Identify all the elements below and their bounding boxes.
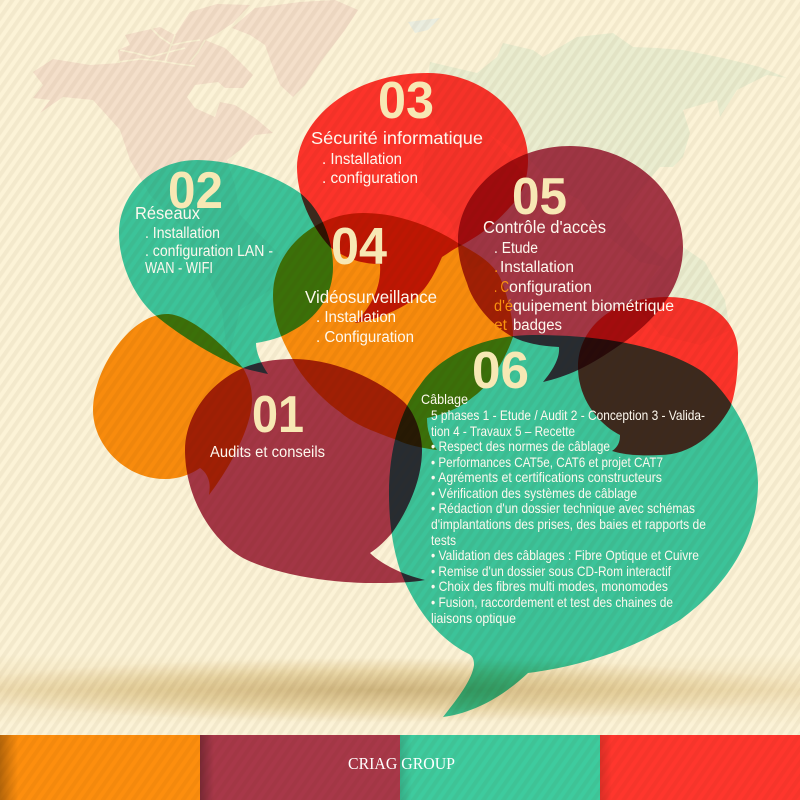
panel 04: Vidéosurveillance text: Vidéosurveillance bbox=[305, 287, 437, 307]
speech bubble 03: red bbox=[297, 73, 528, 323]
speech bubble 05: maroon bbox=[458, 146, 683, 382]
panel 02: Réseaux text bbox=[135, 162, 273, 277]
speech bubble 06: green bbox=[389, 335, 758, 717]
panel 05: Contrôle d'accès text: badges bbox=[513, 317, 562, 334]
panel 06: Câblage text: 5 phases 1 - Etude / Audit 2 - Conception 3 - Valida- bbox=[431, 408, 705, 423]
panel 03: Sécurité informatique text: . configuration bbox=[322, 170, 418, 187]
panel 05: Contrôle d'accès text: Installation bbox=[500, 259, 574, 276]
panel 05: Contrôle d'accès text: quipement biométrique bbox=[513, 298, 674, 315]
speech bubble 04: orange bbox=[273, 213, 513, 450]
ground shadow bbox=[0, 655, 800, 725]
panel 02: Réseaux text: WAN - WIFI bbox=[145, 260, 213, 277]
world map bbox=[33, 0, 786, 324]
panel 03: Sécurité informatique text: Sécurité informatique bbox=[311, 128, 483, 148]
map: Greenland bbox=[232, 0, 358, 97]
panel 04: Vidéosurveillance text: 04 bbox=[331, 218, 387, 276]
panel 04: Vidéosurveillance text: . Installation bbox=[316, 309, 396, 326]
panel 06: Câblage text: Câblage bbox=[421, 392, 468, 407]
panel 06: Câblage text bbox=[421, 342, 706, 626]
panel 03: Sécurité informatique text: 03 bbox=[378, 72, 434, 130]
speech bubble: red right bbox=[578, 297, 738, 455]
speech bubble 01: maroon bbox=[185, 359, 425, 583]
panel 05: Contrôle d'accès text: . bbox=[494, 259, 498, 276]
panel 06: Câblage text: • Rédaction d'un dossier technique avec schémas bbox=[431, 501, 695, 516]
panel 06: Câblage text: • Agréments et certifications constructeurs bbox=[431, 470, 662, 485]
panel 05: Contrôle d'accès text: et bbox=[494, 317, 508, 334]
panel 06: Câblage text: • Validation des câblages : Fibre Optique et Cuivre bbox=[431, 548, 699, 563]
panel 06: Câblage text: • Choix des fibres multi modes, monomodes bbox=[431, 579, 668, 594]
panel 03: Sécurité informatique text bbox=[311, 72, 483, 187]
panel 05: Contrôle d'accès text: onfiguration bbox=[509, 279, 592, 296]
panel 06: Câblage text: • Remise d'un dossier sous CD-Rom interactif bbox=[431, 564, 671, 579]
panel 02: Réseaux text: Réseaux bbox=[135, 203, 200, 223]
panel 06: Câblage text: • Vérification des systèmes de câblage bbox=[431, 486, 637, 501]
panel 02: Réseaux text: . configuration LAN - bbox=[145, 243, 273, 260]
panel 03: Sécurité informatique text: . Installation bbox=[322, 151, 402, 168]
panel 01: Audits et conseils text: Audits et conseils bbox=[210, 444, 325, 461]
footer label: CRIAG GROUP bbox=[348, 754, 455, 773]
panel 02: Réseaux text: . Installation bbox=[145, 225, 220, 242]
panel 01: Audits et conseils text: 01 bbox=[252, 386, 304, 444]
panel 05: Contrôle d'accès text: d'é bbox=[494, 298, 513, 315]
panel 01: Audits et conseils text bbox=[210, 386, 325, 461]
panel 05: Contrôle d'accès text: Contrôle d'accès bbox=[483, 217, 606, 237]
map: Canadian archipelago channels bbox=[118, 27, 205, 66]
panel 06: Câblage text: • Respect des normes de câblage bbox=[431, 439, 610, 454]
panel 06: Câblage text: 06 bbox=[472, 342, 529, 400]
panel 05: Contrôle d'accès text bbox=[483, 168, 674, 334]
panel 06: Câblage text: d'implantations des prises, des baies et rapports de bbox=[431, 517, 706, 532]
map: North America bbox=[33, 4, 272, 181]
speech bubble 02: green bbox=[119, 160, 333, 374]
speech bubble 01: orange bbox=[93, 314, 252, 495]
panel 06: Câblage text: tests bbox=[431, 533, 456, 548]
panel 06: Câblage text: • Fusion, raccordement et test des chaines de bbox=[431, 595, 673, 610]
panel 06: Câblage text: liaisons optique bbox=[431, 611, 516, 626]
footer colour bar bbox=[0, 735, 800, 800]
panel 02: Réseaux text: 02 bbox=[168, 162, 223, 220]
map: Australia bbox=[668, 247, 729, 324]
panel 06: Câblage text: tion 4 - Travaux 5 – Recette bbox=[431, 424, 575, 439]
panel 04: Vidéosurveillance text bbox=[305, 218, 437, 346]
map: Africa bbox=[420, 130, 530, 270]
panel 05: Contrôle d'accès text: 05 bbox=[512, 168, 567, 226]
overlap shade: red over orange bbox=[315, 213, 462, 323]
map: Eurasia bbox=[425, 33, 787, 270]
panel 04: Vidéosurveillance text: . Configuration bbox=[316, 329, 414, 346]
panel 05: Contrôle d'accès text: . C bbox=[494, 279, 509, 296]
panel 05: Contrôle d'accès text: . Etude bbox=[494, 240, 538, 257]
map: Iceland bbox=[408, 18, 440, 33]
panel 06: Câblage text: • Performances CAT5e, CAT6 et projet CAT7 bbox=[431, 455, 663, 470]
